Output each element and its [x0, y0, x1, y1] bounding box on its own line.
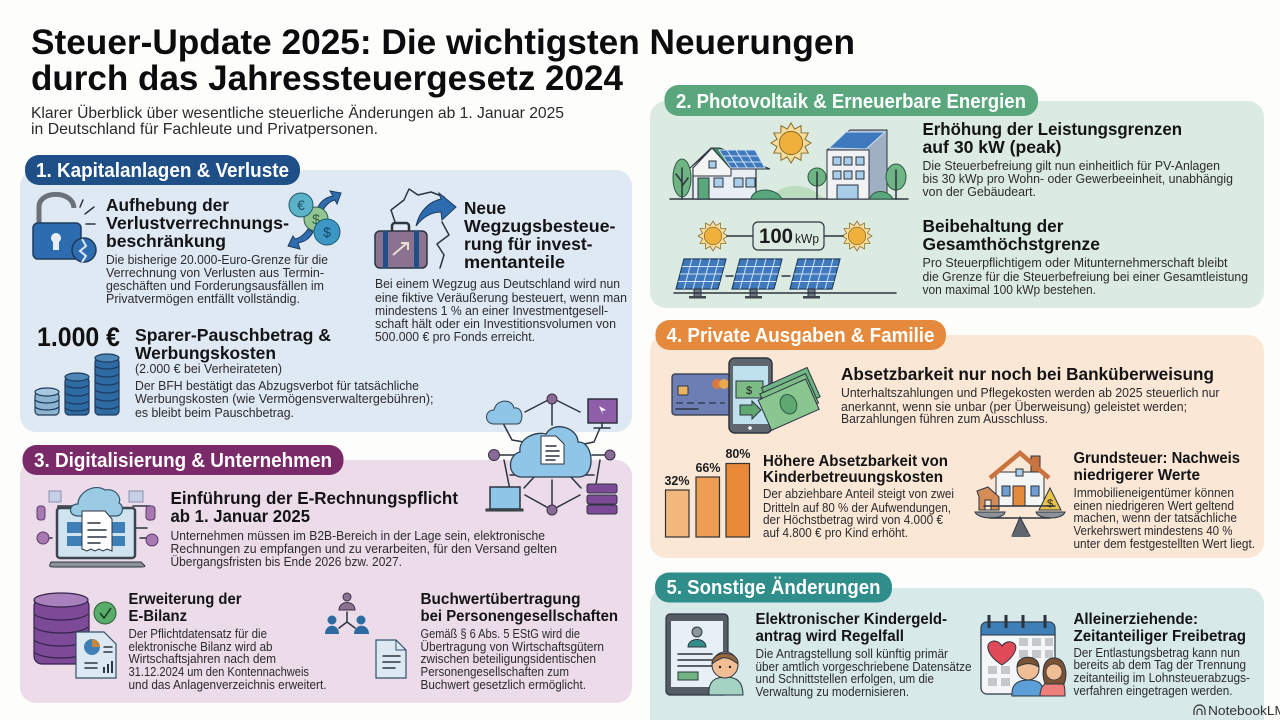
icon: coins and arrows: $ [323, 224, 331, 240]
text: Sparer-Pauschbetrag: es bleibt beim Pauschbetrag. [135, 406, 294, 420]
bar: 80%: 80% [725, 447, 751, 461]
text: Neue Wegzugsbesteuerung [375, 198, 627, 344]
text: Grundsteuer: unter dem festgestellten Wert liegt. [1074, 537, 1255, 551]
text: Alleinerziehende: Zeitanteiliger Freibetrag [1074, 628, 1246, 645]
text: Neue Wegzugsbesteuerung: 500.000 € pro Fonds erreicht. [375, 330, 535, 344]
text: Erweiterung der E-Bilanz: E-Bilanz [128, 608, 187, 625]
panel background [650, 335, 1264, 558]
text: Beibehaltung der Gesamthöchstgrenze: Pro Steuerpflichtigem oder Mitunternehmerschaft bleibt [922, 256, 1228, 270]
heading pill: Digitalisierung [22, 445, 344, 475]
icon: cloud network [486, 394, 617, 515]
text: Aufhebung der Verlustverrechnungsbeschränkung: Aufhebung der [106, 195, 229, 215]
icon: database with check and report [34, 593, 116, 678]
title [31, 23, 855, 98]
panel background [650, 588, 1264, 720]
text: Kinderbetreuungskosten: der Höchstbetrag wird von 4.000 € [763, 513, 943, 527]
text: Erhöhung der Leistungsgrenzen: bis 30 kWp pro Wohn- oder Gewerbeeinheit, unabhängig [922, 172, 1233, 186]
subtitle [31, 104, 564, 138]
icon: coins and arrows: € [297, 197, 305, 213]
text: Kinderbetreuungskosten: Dritteln auf 80 % der Aufwendungen, [763, 501, 951, 515]
icon: 100 kWp limit with solar panels: kWp [795, 231, 819, 246]
panel: 2. Photovoltaik und Erneuerbare Energien [650, 85, 1264, 308]
text: Beibehaltung der Gesamthöchstgrenze: von maximal 100 kWp bestehen. [922, 283, 1096, 297]
heading pill: Sonstige Änderungen: 5. Sonstige Änderungen [666, 576, 880, 599]
icon: suitcase with map and arrow [375, 189, 456, 268]
icon: house and building with solar [670, 123, 908, 199]
panel background [20, 170, 632, 432]
text: Buchwertübertragung: Übertragung von Wirtschaftsgütern [420, 640, 604, 654]
text: Sparer-Pauschbetrag: Der BFH bestätigt das Abzugsverbot für tatsächliche [135, 379, 419, 393]
text: Neue Wegzugsbesteuerung: Neue [464, 198, 506, 218]
text: E-Rechnungspflicht: ab 1. Januar 2025 [170, 506, 310, 526]
text: Erhöhung der Leistungsgrenzen: von der Gebäudeart. [922, 185, 1036, 199]
text: Neue Wegzugsbesteuerung: Wegzugsbesteue- [464, 216, 616, 236]
text: Alleinerziehende: verfahren eingetragen werden. [1074, 684, 1232, 698]
text: E-Rechnungspflicht: Übergangsfristen bis Ende 2026 bzw. 2027. [170, 555, 402, 569]
icon: house on scale [975, 453, 1065, 537]
text: Alleinerziehende: zeitanteilig im Lohnsteuerabzugs- [1074, 671, 1250, 685]
icon: coin stacks [35, 354, 119, 415]
text: Alleinerziehende [1074, 611, 1250, 698]
text: Grundsteuer: Grundsteuer: Nachweis [1074, 450, 1240, 467]
text: Sparer-Pauschbetrag: Sparer-Pauschbetrag & [135, 325, 331, 345]
text: Kinderbetreuungskosten: auf 4.800 € pro Kind erhöht. [763, 526, 908, 540]
text: Alleinerziehende: bereits ab dem Tag der Trennung [1074, 658, 1246, 672]
text: Kindergeldantrag: Verwaltung zu modernisieren. [756, 685, 909, 699]
text: Beibehaltung der Gesamthöchstgrenze: die Grenze für die Steuerbefreiung bei einer Gesamtleistung [922, 270, 1248, 284]
text: Sparer-Pauschbetrag: Werbungskosten (wie Vermögensverwaltergebühren); [135, 392, 434, 406]
watermark: NotebookLM: NotebookLM [1208, 703, 1280, 718]
number: 1.000 Euro: 1.000 € [37, 322, 120, 352]
text: Grundsteuer: niedrigerer Werte [1074, 467, 1200, 484]
text: Buchwertübertragung: Buchwert gesetzlich ermöglicht. [420, 678, 586, 692]
text: Erweiterung der E-Bilanz: Erweiterung der [128, 591, 242, 608]
bar chart: childcare deductibility [664, 447, 751, 537]
text: Erweiterung der E-Bilanz: Der Pflichtdatensatz für die [128, 627, 267, 641]
text: Buchwertübertragung: Gemäß § 6 Abs. 5 EStG wird die [420, 627, 580, 641]
text: Buchwertübertragung: zwischen beteiligungsidentischen [420, 652, 596, 666]
text: Erweiterung der E-Bilanz: elektronische Bilanz wird ab [128, 640, 273, 654]
text: E-Rechnungspflicht [170, 488, 557, 569]
text: Aufhebung der Verlustverrechnungsbeschränkung: Verlustverrechnungs- [106, 213, 289, 233]
panel background [20, 460, 632, 703]
text: Buchwertübertragung [420, 591, 618, 692]
text: Sparer-Pauschbetrag [135, 325, 434, 420]
icon: partners and document [325, 593, 406, 678]
text: Kindergeldantrag: antrag wird Regelfall [756, 628, 904, 645]
text: Erhöhung der Leistungsgrenzen: Die Steuerbefreiung gilt nun einheitlich für PV-Anlagen [922, 159, 1220, 173]
text: Erhöhung der Leistungsgrenzen: auf 30 kW (peak) [922, 137, 1062, 157]
text: Erweiterung der E-Bilanz: 31.12.2024 um den Kontennachweis [128, 665, 309, 679]
text: Buchwertübertragung: bei Personengesellschaften [420, 608, 618, 625]
text: Grundsteuer: Immobilieneigentümer können [1074, 486, 1234, 500]
text: Neue Wegzugsbesteuerung: schaft hält oder ein Investitionsvolumen von [375, 317, 616, 331]
heading pill: Kapitalanlagen: 1. Kapitalanlagen & Verluste [36, 160, 289, 182]
panel: 1. Kapitalanlagen und Verluste [20, 155, 632, 432]
text: Alleinerziehende: Der Entlastungsbetrag kann nun [1074, 646, 1240, 660]
heading pill: Private Ausgaben [656, 320, 946, 350]
icon: coins and arrows [288, 191, 341, 249]
text: Kinderbetreuungskosten: Kinderbetreuungskosten [763, 469, 943, 486]
text: Kinderbetreuungskosten [763, 453, 954, 540]
text: Kindergeldantrag: Elektronischer Kindergeld- [756, 611, 947, 628]
heading pill: Private Ausgaben: 4. Private Ausgaben & Familie [666, 325, 934, 347]
text: Grundsteuer [1074, 450, 1255, 551]
icon: 100 kWp limit with solar panels: 100 [759, 225, 793, 248]
text: Kindergeldantrag [756, 611, 972, 699]
icon: 100 kWp limit with solar panels [674, 221, 896, 298]
panel: 4. Private Ausgaben und Familie [650, 320, 1264, 558]
text: Grundsteuer: machen, wenn der tatsächliche [1074, 511, 1237, 525]
heading pill: Photovoltaik: 2. Photovoltaik & Erneuerbare Energien [676, 91, 1026, 113]
icon: coins and arrows: $ [312, 211, 320, 227]
text: Kindergeldantrag: Die Antragstellung soll künftig primär [756, 647, 948, 661]
text: Alleinerziehende: Alleinerziehende: [1074, 611, 1198, 628]
heading pill: Kapitalanlagen [25, 155, 300, 185]
text: Buchwertübertragung: Buchwertübertragung [420, 591, 580, 608]
bar: 32%: 32% [664, 474, 690, 488]
text: Kindergeldantrag: und Schnittstellen erfolgen, um die [756, 672, 934, 686]
text: Beibehaltung der Gesamthöchstgrenze: Gesamthöchstgrenze [922, 234, 1100, 254]
text: Grundsteuer: Verkehrswert mindestens 40 % [1074, 524, 1232, 538]
text: Absetzbarkeit nur noch bei Banküberweisung [841, 364, 1220, 426]
text: Neue Wegzugsbesteuerung: mentanteile [464, 252, 565, 272]
heading pill: Photovoltaik [664, 85, 1038, 116]
subtitle: in Deutschland für Fachleute und Privatpersonen. [31, 121, 378, 138]
text: Erweiterung der E-Bilanz: Wirtschaftsjahren nach dem [128, 652, 276, 666]
icon: open lock [33, 194, 96, 262]
text: Neue Wegzugsbesteuerung: mindestens 1 % an einer Investmentgesell- [375, 304, 608, 318]
text: Kindergeldantrag: über amtlich vorgeschriebene Datensätze [756, 660, 972, 674]
heading pill: Digitalisierung: 3. Digitalisierung & Unternehmen [34, 450, 332, 472]
text: Beibehaltung der Gesamthöchstgrenze: Beibehaltung der [922, 216, 1064, 236]
text: Aufhebung der Verlustverrechnungsbeschränkung: beschränkung [106, 231, 226, 251]
text: Absetzbarkeit nur noch bei Banküberweisung: anerkannt, wenn sie unbar (per Überweisung) geleistet werden; [841, 400, 1187, 414]
text: Grundsteuer: einen niedrigeren Wert geltend [1074, 499, 1234, 513]
icon: tablet with child [666, 614, 743, 695]
text: Sparer-Pauschbetrag: (2.000 € bei Verheirateten) [135, 362, 282, 376]
icon: card, phone and cash: $ [746, 385, 752, 397]
icon: house on scale: $ [1047, 498, 1053, 510]
text: Absetzbarkeit nur noch bei Banküberweisung: Barzahlungen führen zum Ausschluss. [841, 412, 1048, 426]
text: Neue Wegzugsbesteuerung: Bei einem Wegzug aus Deutschland wird nun [375, 277, 620, 291]
text: E-Rechnungspflicht: Einführung der E-Rechnungspflicht [170, 488, 458, 508]
text: Aufhebung der Verlustverrechnungsbeschränkung: Die bisherige 20.000-Euro-Grenze für die [106, 253, 328, 267]
icon: e-invoice laptop [37, 488, 158, 567]
text: Absetzbarkeit nur noch bei Banküberweisung: Absetzbarkeit nur noch bei Banküberweisung [841, 364, 1214, 384]
title: durch das Jahressteuergesetz 2024 [31, 59, 624, 98]
panel background [650, 101, 1264, 308]
text: E-Rechnungspflicht: Rechnungen zu empfangen und zu verarbeiten, für den Versand gelten [170, 542, 557, 556]
icon: calendar with parents [981, 615, 1066, 696]
title: Steuer-Update 2025: Die wichtigsten Neuerungen [31, 23, 855, 62]
text: Erhöhung der Leistungsgrenzen: Erhöhung der Leistungsgrenzen [922, 119, 1182, 139]
text: Erweiterung der E-Bilanz [128, 591, 326, 692]
text: Erweiterung der E-Bilanz: und das Anlagenverzeichnis erweitert. [128, 678, 326, 692]
text: Kinderbetreuungskosten: Höhere Absetzbarkeit von [763, 453, 948, 470]
heading pill: Sonstige Änderungen [655, 572, 892, 602]
text: Kinderbetreuungskosten: Der abziehbare Anteil steigt von zwei [763, 487, 954, 501]
subtitle: Klarer Überblick über wesentliche steuerliche Änderungen ab 1. Januar 2025 [31, 104, 564, 122]
text: Absetzbarkeit nur noch bei Banküberweisung: Unterhaltszahlungen und Pflegekosten werden ab 2025 steuerlich nur [841, 386, 1220, 400]
icon: card, phone and cash [672, 358, 825, 433]
text: Aufhebung der Verlustverrechnungsbeschränkung: Privatvermögen entfällt vollständig. [106, 292, 300, 306]
text: Beibehaltung der Gesamthöchstgrenze [922, 216, 1248, 297]
text: Aufhebung der Verlustverrechnungsbeschränkung [106, 195, 328, 306]
bar: 66%: 66% [695, 461, 721, 475]
text: Neue Wegzugsbesteuerung: eine fiktive Veräußerung besteuert, wenn man [375, 291, 627, 305]
text: Neue Wegzugsbesteuerung: rung für invest- [464, 234, 593, 254]
text: Buchwertübertragung: Personengesellschaften zum [420, 665, 569, 679]
text: E-Rechnungspflicht: Unternehmen müssen im B2B-Bereich in der Lage sein, elektronische [170, 529, 545, 543]
text: Sparer-Pauschbetrag: Werbungskosten [135, 343, 276, 363]
panel: 5. Sonstige Änderungen [650, 572, 1280, 720]
text: Aufhebung der Verlustverrechnungsbeschränkung: geschäften und Forderungsausfällen im [106, 279, 324, 293]
text: Erhöhung der Leistungsgrenzen [922, 119, 1233, 199]
panel: 3. Digitalisierung und Unternehmen [20, 445, 632, 703]
text: Aufhebung der Verlustverrechnungsbeschränkung: Verrechnung von Verlusten aus Termin- [106, 266, 324, 280]
